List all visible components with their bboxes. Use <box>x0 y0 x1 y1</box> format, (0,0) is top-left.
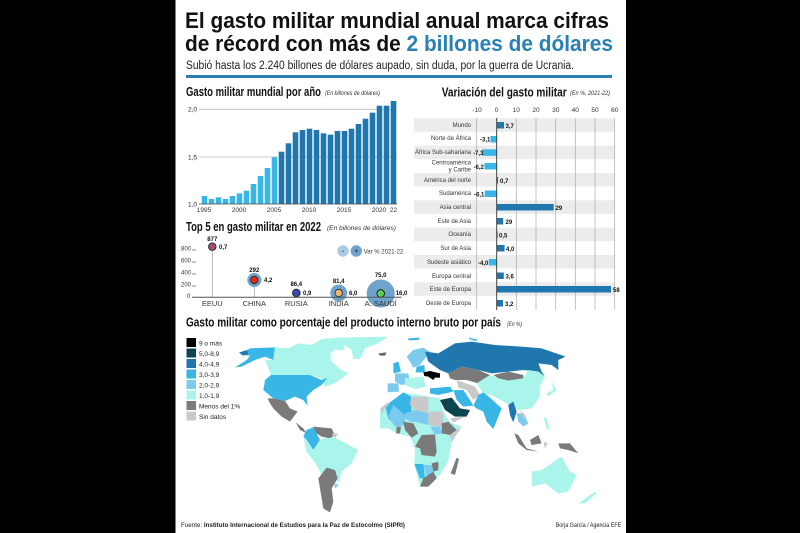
legend: variación: + <box>354 248 358 255</box>
panel: variación del gasto militar <box>414 84 620 310</box>
value labels: 0,7 <box>500 179 509 185</box>
value labels <box>473 124 620 308</box>
map: Europa, África, Asia y Oceanía <box>380 338 597 503</box>
region labels: y Caribe <box>449 168 472 174</box>
panel: top 5 en gasto militar: 600 <box>181 258 192 264</box>
region labels: Sudeste asiático <box>427 260 472 266</box>
bubble: India <box>330 279 358 301</box>
value labels: -7,3 <box>473 151 484 157</box>
region labels: África Sub-sahariana <box>415 149 472 156</box>
region labels: Mundo <box>453 123 472 129</box>
region labels: Este de Asia <box>438 219 472 225</box>
panel: top 5 en gasto militar: 400 <box>181 270 192 276</box>
panel: variación del gasto militar: 40 <box>572 107 579 114</box>
bubble: China <box>247 268 273 287</box>
legend: mapa: 4,0-4,9 <box>199 362 220 368</box>
panel: top 5 en gasto militar <box>181 219 408 308</box>
heading: top 5: Top 5 en gasto militar en 2022 <box>186 219 321 234</box>
value labels: 29 <box>506 220 513 226</box>
region labels: Europa central <box>432 274 471 280</box>
heading: variación: Variación del gasto militar <box>442 84 567 100</box>
region labels: Centroamérica <box>432 160 472 166</box>
value labels: -6,1 <box>474 192 485 198</box>
bubble: Rusia <box>290 282 312 298</box>
legend: mapa: Sin datos <box>199 414 227 421</box>
legend: mapa: 3,0-3,9 <box>199 372 220 379</box>
bubble: India: 6,0 <box>349 291 358 297</box>
value labels: 3,6 <box>506 274 515 280</box>
legend: mapa: 9 o más <box>199 340 223 348</box>
heading: mapa: Gasto militar como porcentaje del producto interno bruto por país <box>186 314 501 330</box>
panel: top 5 en gasto militar: INDIA <box>329 299 349 308</box>
value labels: 29 <box>556 206 563 212</box>
panel: gasto militar mundial por año: 2000 <box>232 207 247 214</box>
bubble: Arabia Saudí <box>367 273 408 308</box>
value labels: 0,5 <box>499 234 508 240</box>
region labels: Sudamérica <box>439 191 472 197</box>
legend: variación: Var % 2021-22 <box>364 250 404 256</box>
bubble: EEUU: 877 <box>207 237 218 243</box>
panel: gasto militar mundial por año <box>186 84 397 214</box>
region labels: Oceanía <box>448 232 472 238</box>
region labels: Este de Europa <box>430 287 472 293</box>
map: América <box>235 337 388 512</box>
bubble: EEUU <box>207 237 228 251</box>
bubble: Rusia: 86,4 <box>290 282 303 288</box>
panel: variación del gasto militar: -10 <box>472 107 482 114</box>
bar chart: variación por región <box>482 122 611 306</box>
title: El gasto militar mundial anual marca cifras <box>185 8 609 33</box>
panel: variación del gasto militar: 60 <box>611 107 619 114</box>
region labels: Norte de África <box>431 135 472 142</box>
region labels <box>415 123 472 307</box>
legend: mapa <box>186 338 240 421</box>
panel: top 5 en gasto militar: 800 <box>181 246 192 252</box>
panel: gasto militar mundial por año: 22 <box>390 207 397 214</box>
legend: mapa: 1,0-1,9 <box>199 393 220 400</box>
note: unidades: (En billones de dólares) <box>325 90 380 97</box>
bubble: EEUU: 0,7 <box>219 245 228 251</box>
value labels: 4,0 <box>506 247 515 253</box>
bar chart: gasto anual <box>202 101 396 204</box>
panel: gasto militar mundial por año: 2015 <box>337 207 352 214</box>
bubble: India: 81,4 <box>333 279 345 285</box>
legend: mapa: 2,0-2,9 <box>199 382 220 390</box>
panel: top 5 en gasto militar: RUSIA <box>285 299 308 308</box>
panel: top 5 en gasto militar: EEUU <box>202 299 223 308</box>
panel: variación del gasto militar: 50 <box>591 107 599 114</box>
value labels: -4,0 <box>478 261 489 267</box>
title <box>185 8 613 56</box>
panel: gasto militar mundial por año: 2010 <box>302 207 317 214</box>
panel: variación del gasto militar: 10 <box>513 107 520 114</box>
bubble: Arabia Saudí: 75,0 <box>375 273 387 279</box>
legend: mapa: Menos del 1% <box>199 404 240 410</box>
value labels: 58 <box>613 288 620 294</box>
note: unidades variación: (En %, 2021-22) <box>570 90 610 97</box>
subtitle: Subió hasta los 2.240 billones de dólares aupado, sin duda, por la guerra de Ucrania. <box>186 60 574 72</box>
heading: gasto por año: Gasto militar mundial por año <box>186 84 321 99</box>
panel: top 5 en gasto militar: 0 <box>187 294 191 300</box>
panel: top 5 en gasto militar: A. SAUDÍ <box>365 299 398 308</box>
note: unidades mapa: (En %) <box>507 321 522 328</box>
panel: gasto militar mundial por año: 2020 <box>372 207 387 214</box>
title: de récord con más de 2 billones de dólares <box>185 31 613 56</box>
legend: variación <box>337 245 404 257</box>
legend: mapa: 5,0-8,9 <box>199 351 220 358</box>
region labels: Sur de Asia <box>440 246 472 252</box>
panel: variación del gasto militar: 30 <box>552 107 560 114</box>
value labels: 3,7 <box>506 124 515 130</box>
region labels: Oeste de Europa <box>426 301 472 307</box>
region labels: América del norte <box>424 178 472 184</box>
bubble: Arabia Saudí: 16,0 <box>396 291 408 297</box>
bubble: Rusia: 0,9 <box>303 291 312 297</box>
panel: gasto militar mundial por año: 1995 <box>197 207 212 214</box>
bubble: China: 4,2 <box>264 278 273 284</box>
panel: variación del gasto militar: 20 <box>532 107 540 114</box>
region labels: Asia central <box>440 205 471 211</box>
panel: gasto militar mundial por año: 2005 <box>267 207 282 214</box>
note: unidades top 5: (En billones de dólares) <box>327 225 396 232</box>
panel: top 5 en gasto militar: 200 <box>181 282 192 288</box>
value labels: -3,1 <box>480 138 491 144</box>
value labels: 3,2 <box>505 302 514 308</box>
panel: gasto militar mundial por año: 2,0 <box>188 106 197 114</box>
bubble: China: 292 <box>249 268 260 274</box>
source: Fuente: Instituto Internacional de Estudios para la Paz de Estocolmo (SIPRI) <box>181 522 405 529</box>
panel: top 5 en gasto militar: CHINA <box>243 299 266 308</box>
panel: variación del gasto militar: 0 <box>495 107 499 114</box>
panel: gasto militar mundial por año: 1,0 <box>188 202 197 208</box>
legend: variación: - <box>342 248 344 255</box>
credit: Borja García / Agencia EFE <box>556 523 621 529</box>
panel: gasto militar mundial por año: 1,5 <box>188 154 197 162</box>
value labels: -6,2 <box>474 165 485 171</box>
